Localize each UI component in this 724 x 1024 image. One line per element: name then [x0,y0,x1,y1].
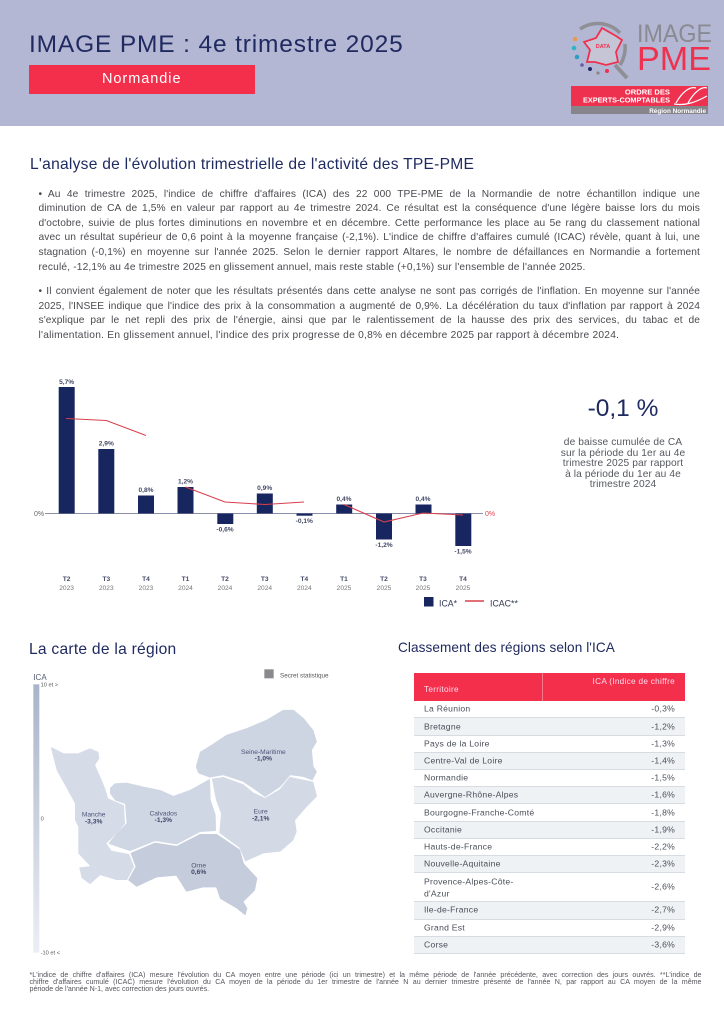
year labels: 2024 [297,585,312,592]
table header [414,673,685,701]
table rows: Pays de la Loire [424,739,490,749]
text block: paragraph 2: • Il convient également de noter que les résultats présentés dans cette analyse ne sont pas corrigés de l'inflation. En moyenne sur l'année [38,286,700,297]
department labels: Seine-Maritime [241,749,286,756]
year labels: 2023 [99,585,114,592]
text block: paragraph 1: diminution de CA de 1,5% en valeur par rapport au 4e trimestre 2024. Ce résultat est la conséquence d'une légère baisse lors du mois [38,203,700,214]
axis labels: 0% [485,511,495,518]
callout text: trimestre 2024 [590,479,656,490]
text block: paragraph 2: s'explique par le net repli des prix de l'énergie, ainsi que par le ralentissement de la hausse des prix des services, du tabac et de [38,315,700,326]
logo: ordre des experts-comptables: EXPERTS-COMPTABLES [583,96,670,104]
icon: magnifier with France outline [572,23,627,78]
table rows: -2,2% [651,842,675,852]
year labels: 2025 [377,585,392,592]
footnote: chiffre d'affaires cumulé (ICAC) mesure l'évolution du CA moyen de la période du 1er trimestre de l'année N au dernier trimestre présenté de l'année N, par rapport au CA moyen de la même [30,978,702,986]
year labels: 2025 [337,585,352,592]
text block: paragraph 1: • Au 4e trimestre 2025, l'indice de chiffre d'affaires (ICA) des 22 000 TPE-PME de la Normandie de notre échantillon indique une [38,188,700,200]
table rows: -1,6% [651,790,675,800]
text block: paragraph 1: avec un résultat supérieur de 0,6 point à la moyenne française (-2,1%). L'indice de chiffre d'affaires cumulé (ICAC) révèle, quant à lui, une [38,232,700,243]
table rows: -0,3% [651,704,675,714]
quarter labels [63,576,467,583]
department values: -2,1% [252,815,269,822]
logo: ordre des experts-comptables: ORDRE DES [625,88,670,96]
footnote [30,971,702,993]
table rows: Provence-Alpes-Côte- [424,877,514,887]
table rows: Hauts-de-France [424,842,492,852]
text block: paragraph 1 [38,188,700,272]
department: Orne [129,835,257,914]
table rows: -2,7% [651,905,675,915]
department values: -1,0% [255,756,272,763]
bar value labels: 0,4% [415,496,431,503]
table rows: La Réunion [424,704,470,714]
logo: ordre des experts-comptables [571,86,708,115]
map of the region [33,669,329,957]
department: Manche [52,748,133,883]
table rows: -1,5% [651,773,675,783]
logo wordmark [637,20,712,77]
table rows: Normandie [424,773,468,783]
quarter labels: T1 [340,576,348,583]
colour scale legend: 10 et > [41,682,59,688]
bar value labels: 2,9% [99,440,114,448]
bar value labels: 0,4% [336,496,352,503]
logo wordmark: PME [637,40,711,77]
bar value labels [59,379,472,556]
table rows: Bretagne [424,721,461,731]
icon: magnifier with France outline: DATA [596,44,610,50]
bar value labels: -0,1% [296,518,313,525]
department values: -1,3% [155,817,172,824]
quarter labels: T4 [300,576,308,583]
text block: paragraph 2: 2025, l'INSEE indique que l'indice des prix à la consommation a augmenté de 0,9%. La décélération du taux d'inflation par rapport à 2024 [38,301,700,312]
text block: paragraph 2 [38,286,700,341]
footnote: *L'indice de chiffre d'affaires (ICA) mesure l'évolution du CA moyen entre une période (ici un trimestre) et la même période de l'année précédente, avec correction des jours ouvrés. **L'indice de [30,971,702,979]
table header: Territoire [424,685,459,694]
table rows: d'Azur [424,888,450,898]
table rows: -1,4% [651,756,675,766]
table rows: Auvergne-Rhône-Alpes [424,790,518,800]
table rows: -1,3% [651,739,675,749]
title: IMAGE PME : 4e trimestre 2025 [29,31,404,58]
text block: paragraph 1: d'octobre, suivie de plus fortes diminutions en novembre et en décembre. Cette performance les place au 5e rang du classement national [38,218,700,229]
callout text: sur la période du 1er au 4e [561,448,685,459]
ICAC line [66,418,463,522]
quarter labels: T4 [459,576,467,583]
callout figure: -0,1 % [588,395,658,422]
colour scale legend: -10 et < [41,951,61,957]
table rows: -1,2% [651,721,675,731]
table rows: Bourgogne-Franche-Comté [424,807,534,817]
logo wordmark: IMAGE [637,20,712,48]
quarter labels: T2 [380,576,388,583]
logo: ordre des experts-comptables: Région Normandie [649,108,706,115]
bar value labels: -1,5% [454,548,472,556]
heading: ranking: Classement des régions selon l'ICA [398,640,615,655]
quarter labels: T3 [419,576,427,583]
table rows: -1,8% [651,807,675,817]
table rows: -1,9% [651,825,675,835]
quarter labels: T4 [142,576,150,583]
chart legend [424,597,518,608]
year labels: 2024 [178,585,193,592]
table rows: Nouvelle-Aquitaine [424,859,501,869]
quarter labels: T3 [261,576,269,583]
logo [571,20,712,115]
department labels: Eure [254,809,268,816]
year labels: 2024 [257,585,272,592]
text block: paragraph 2: l'alimentation. En glissement annuel, l'indice des prix progresse de 0,8% en décembre 2025 par rapport à décembre 2024. [38,330,619,341]
footnote: période de l'année N-1, avec correction des jours ouvrés. [30,985,209,993]
table rows: Occitanie [424,825,462,835]
department: Eure [213,778,316,861]
table rows: -3,6% [651,940,675,950]
callout text: de baisse cumulée de CA [564,437,682,448]
year labels: 2023 [59,585,74,592]
department labels: Manche [82,812,106,819]
table rows: Centre-Val de Loire [424,756,503,766]
table rows: Ile-de-France [424,905,478,915]
year labels: 2024 [218,585,233,592]
department values: 0,6% [191,869,206,876]
ranking table [414,673,685,701]
region label [29,65,255,94]
text block: paragraph 1: reculé, -12,1% au 4e trimestre 2025 en glissement annuel, mais reste stable (+0,1%) sur l'ensemble de l'année 2025. [38,262,585,272]
department: Calvados [109,780,215,850]
table rows: Corse [424,940,448,950]
callout text: à la période du 1er au 4e [565,469,681,480]
callout text: trimestre 2025 par rapport [563,458,683,469]
axis labels: 0% [34,511,44,518]
heading: analysis: L'analyse de l'évolution trimestrielle de l'activité des TPE-PME [30,156,474,173]
department values: -3,3% [85,819,102,826]
header band [0,0,724,126]
legend: secret statistique [264,669,329,680]
department values [85,756,272,876]
callout: cumulative drop [561,395,685,490]
callout text [561,437,685,490]
department labels: Calvados [149,810,178,817]
table rows: -2,9% [651,923,675,933]
quarter labels: T2 [221,576,229,583]
year labels: 2025 [416,585,431,592]
colour scale legend: ICA [33,673,47,682]
table rows: Grand Est [424,923,465,933]
text block: paragraph 1: stagnation (-0,1%) en moyenne sur l'année 2025. Selon le dernier rapport Altares, le nombre de défaillances en Normandie a fortement [38,247,700,258]
bar value labels: 5,7% [59,379,74,386]
quarter labels: T2 [63,576,71,583]
department: Seine-Maritime [197,711,316,796]
legend: secret statistique: Secret statistique [280,673,329,680]
bar chart: ICA and ICAC [34,379,518,608]
department labels: Orne [191,862,206,869]
table rows: -2,6% [651,882,675,892]
chart legend: ICA* [439,598,458,608]
table rows [414,704,685,954]
bar value labels: -1,2% [375,542,393,549]
table header: ICA (Indice de chiffre [593,677,675,686]
bar value labels: 1,2% [178,478,193,486]
quarter labels: T1 [182,576,190,583]
bar value labels: 0,9% [257,485,272,492]
colour scale legend [33,673,61,957]
heading: map: La carte de la région [29,641,176,658]
chart legend: ICAC** [490,598,518,608]
bar value labels: -0,6% [216,526,234,534]
year labels: 2023 [139,585,154,592]
region label: Normandie [102,71,181,87]
table rows: -2,3% [651,859,675,869]
department labels [82,749,286,869]
bar value labels: 0,8% [138,487,154,494]
year labels: 2025 [456,585,471,592]
quarter labels: T3 [102,576,110,583]
colour scale legend: 0 [41,817,44,823]
year labels [59,585,471,592]
bars [59,387,471,546]
axis labels [34,511,495,518]
